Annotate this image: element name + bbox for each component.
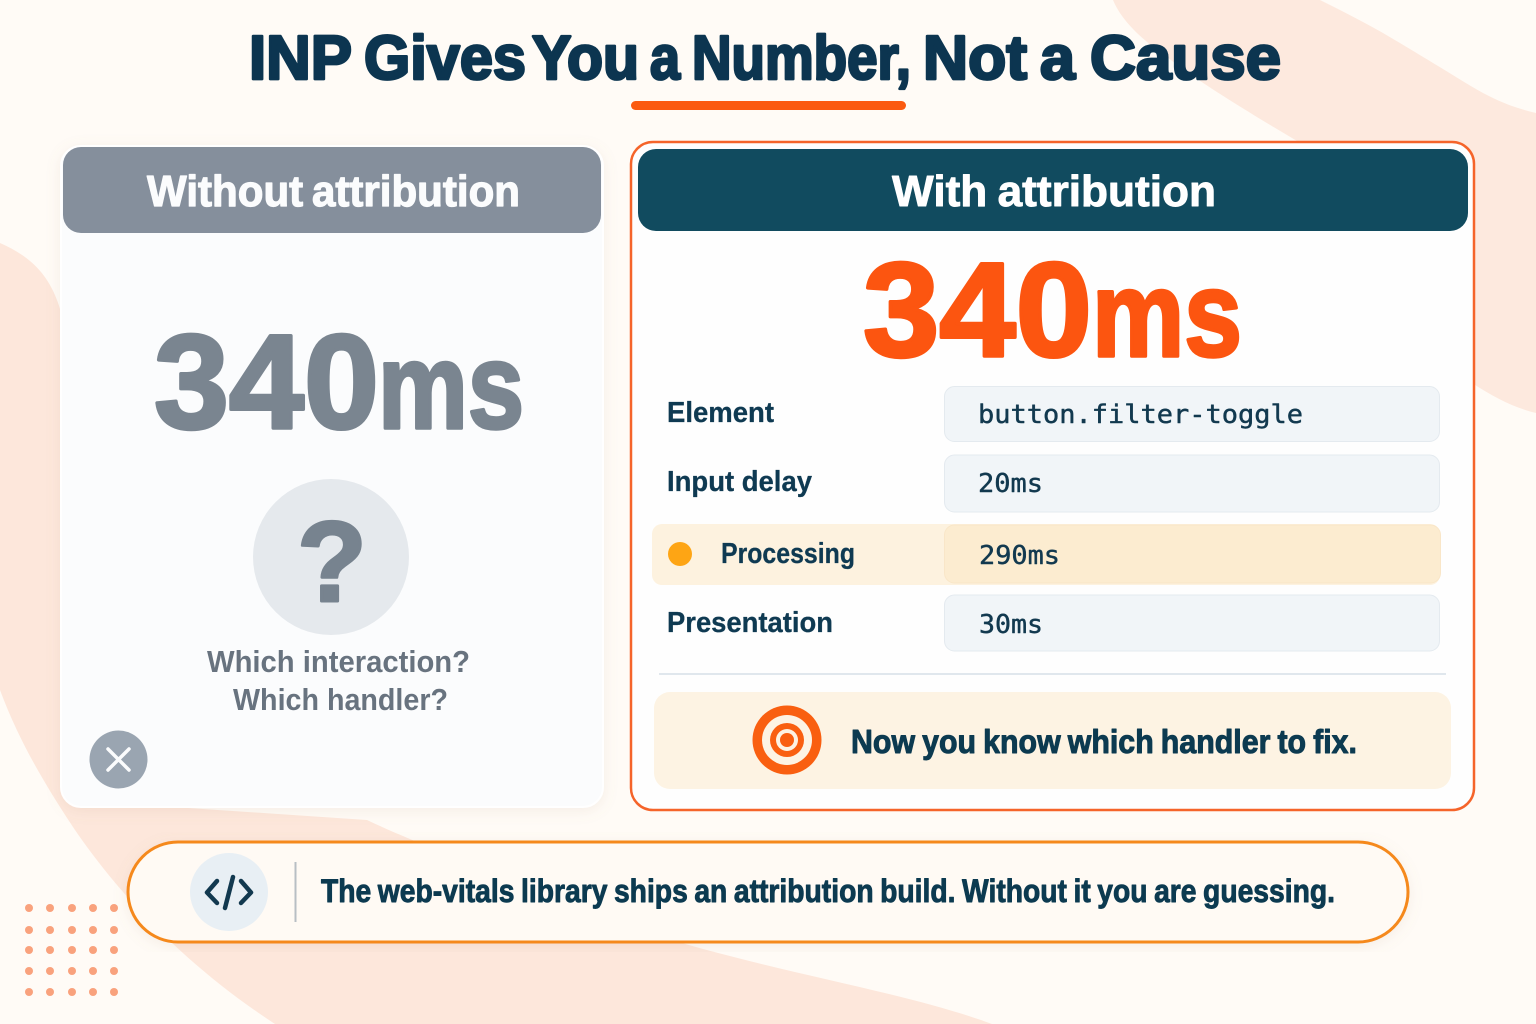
metric value <box>863 236 1242 385</box>
row: processing highlighted: 290ms <box>979 541 1060 571</box>
row: processing highlighted <box>652 524 1440 585</box>
panel header <box>63 147 601 233</box>
panel: without attribution <box>61 146 603 807</box>
icon: status dot <box>668 542 692 566</box>
title underline <box>631 101 906 110</box>
title: a <box>650 24 680 93</box>
icon: target <box>752 706 822 774</box>
title: Number, <box>692 24 911 93</box>
icon: code <box>190 853 268 931</box>
footer note: The web-vitals library ships an attribution build. Without it you are guessing. <box>321 873 1335 909</box>
row: presentation <box>667 595 1440 651</box>
row: input delay <box>667 455 1440 512</box>
metric value: 340 <box>863 236 1092 385</box>
metric value: ms <box>378 318 524 454</box>
title: Not <box>923 24 1027 93</box>
icon: cross <box>90 730 148 788</box>
row: input delay: 20ms <box>978 469 1043 499</box>
question text: Which interaction? <box>207 644 470 679</box>
metric value: 340 <box>154 308 379 457</box>
question text <box>207 644 470 717</box>
title <box>249 24 1281 93</box>
row: input delay: Input delay <box>667 466 812 498</box>
row: element: Element <box>667 397 774 429</box>
panel background <box>61 146 603 807</box>
panel: with attribution <box>631 142 1474 810</box>
row: element <box>667 386 1440 442</box>
decorative dots <box>25 904 118 996</box>
title: Cause <box>1090 24 1281 93</box>
row: element: button.filter-toggle <box>978 400 1303 430</box>
row: presentation: 30ms <box>979 610 1043 640</box>
title: a <box>1040 24 1076 93</box>
icon: question mark: ? <box>297 499 367 626</box>
footer note <box>128 842 1408 942</box>
header label: Without attribution <box>147 167 520 216</box>
title: INP <box>249 24 352 93</box>
header label: With attribution <box>892 167 1216 216</box>
metric value: ms <box>1092 246 1242 382</box>
panel header <box>638 149 1468 231</box>
metric value <box>154 308 524 457</box>
callout: conclusion: Now you know which handler to fix. <box>851 723 1357 760</box>
icon: question mark <box>253 479 409 635</box>
title: You <box>532 24 639 93</box>
callout: conclusion <box>654 692 1451 789</box>
panel background <box>631 142 1474 810</box>
row: presentation: Presentation <box>667 607 833 639</box>
title: Gives <box>364 24 526 93</box>
question text: Which handler? <box>233 682 448 717</box>
row: processing highlighted: Processing <box>721 538 855 570</box>
